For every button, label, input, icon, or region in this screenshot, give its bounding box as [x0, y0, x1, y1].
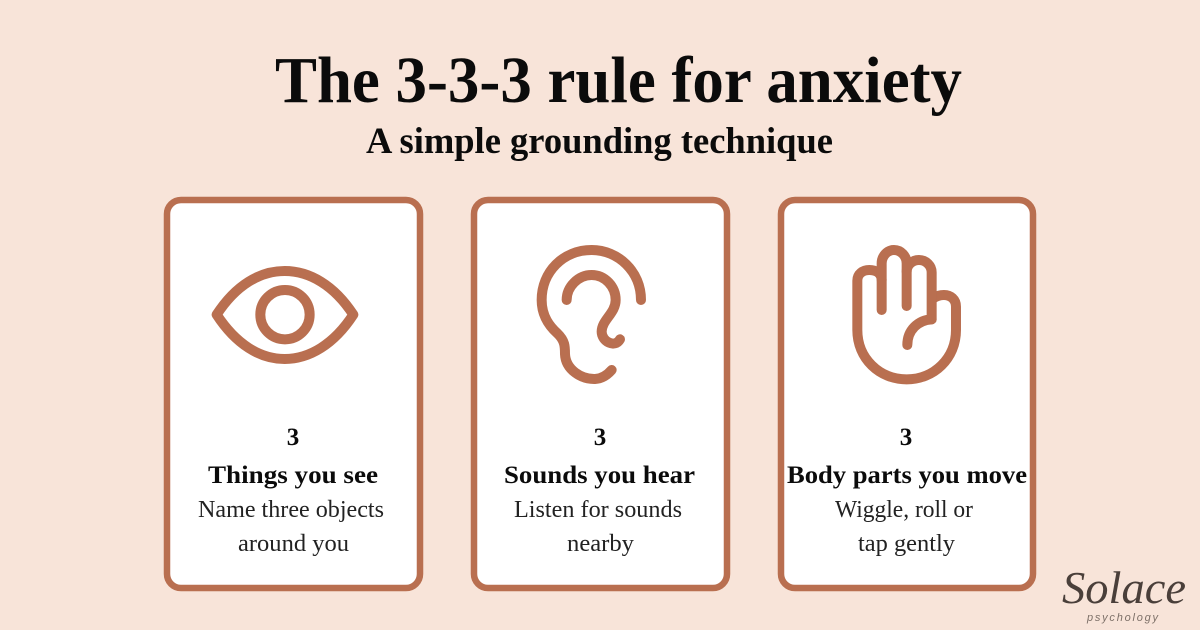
description: tap gently	[858, 531, 955, 557]
description: around you	[238, 531, 349, 557]
title: The 3-3-3 rule for anxiety	[275, 44, 962, 117]
icon: eye	[217, 271, 353, 359]
count: 3	[287, 424, 299, 451]
card background	[167, 200, 420, 588]
panel: hear	[474, 200, 727, 588]
panel: see	[167, 200, 420, 588]
count: 3	[900, 424, 912, 451]
description	[835, 497, 973, 557]
icon: hand	[857, 250, 956, 379]
logo: Solace psychology: Solace	[1062, 562, 1186, 613]
card background	[474, 200, 727, 588]
description	[198, 497, 384, 557]
icon: ear	[542, 250, 641, 379]
count: 3	[594, 424, 606, 451]
description: Name three objects	[198, 497, 384, 523]
heading: things you see: Things you see	[208, 462, 378, 489]
card background	[781, 200, 1033, 588]
logo: Solace psychology: psychology	[1086, 612, 1160, 624]
subtitle: A simple grounding technique	[366, 121, 833, 162]
panel: move	[781, 200, 1033, 588]
heading: body parts you move: Body parts you move	[787, 462, 1027, 489]
description: Wiggle, roll or	[835, 497, 973, 523]
heading: sounds you hear: Sounds you hear	[504, 462, 695, 489]
description: Listen for sounds	[514, 497, 682, 523]
description: nearby	[567, 531, 634, 557]
description	[514, 497, 682, 557]
